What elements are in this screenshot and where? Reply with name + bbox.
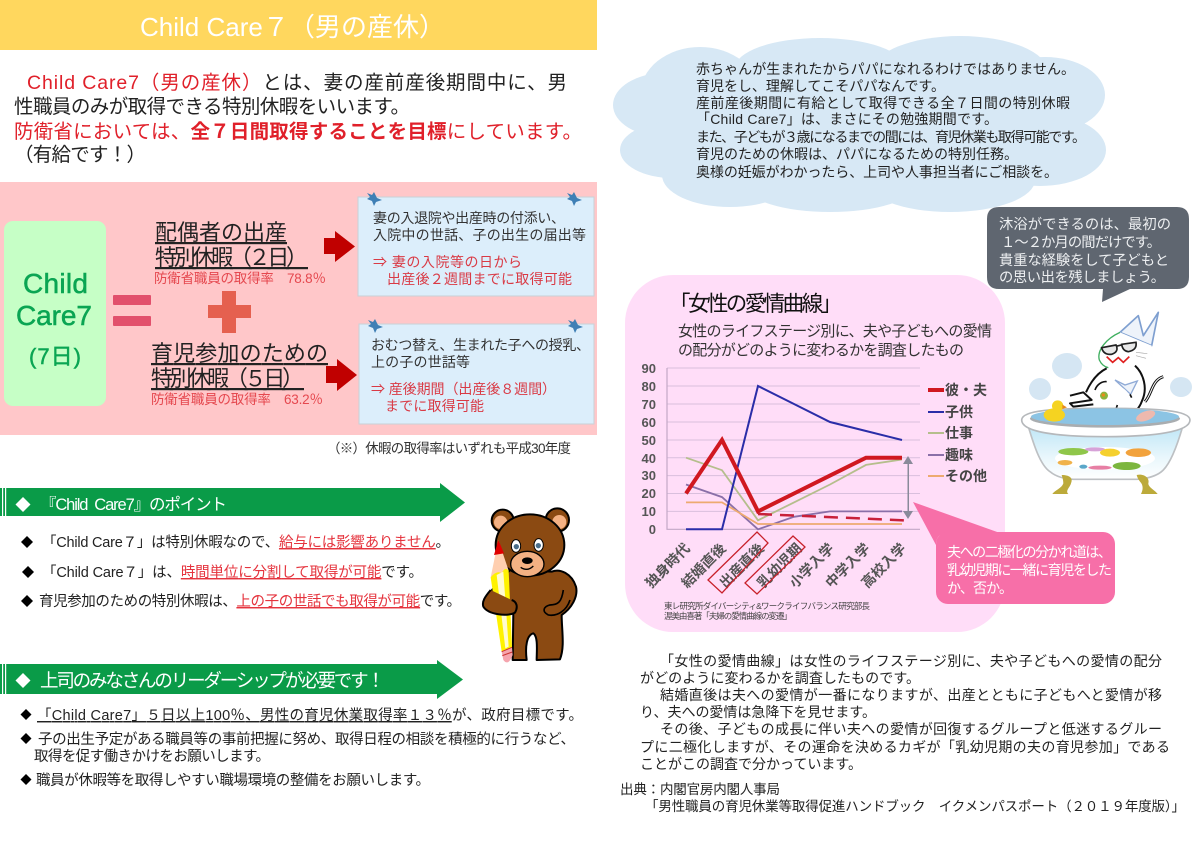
cloud text: [696, 61, 1086, 180]
y axis labels: 20: [642, 486, 656, 501]
illustration: bear with pencil: [483, 508, 576, 662]
x axis labels: 独身時代: [642, 540, 693, 591]
line chart: [642, 361, 987, 594]
heading: childcare participation leave: 防衛省職員の取得率 63.2％: [151, 391, 323, 407]
chart credit: 東レ研究所ダイバーシティ&ワークライフバランス研究部長: [664, 601, 870, 611]
item 2: [20, 730, 575, 765]
green box: Child Care7: Child: [23, 268, 88, 299]
point 3: 育児参加のための特別休暇は、上の子の世話でも取得が可能です。: [39, 593, 461, 610]
green arrow heading: leadership: 上司のみなさんのリーダーシップが必要です！: [40, 670, 385, 691]
note: spouse leave details: 妻の入退院や出産時の付添い、: [373, 210, 565, 226]
legend: 仕事: [945, 425, 973, 441]
heading: spouse childbirth leave: 配偶者の出産: [155, 220, 287, 245]
intro text block: Child Care7（男の産休）とは、妻の産前産後期間中に、男: [27, 72, 567, 94]
note: childcare leave details: 上の子の世話等: [371, 354, 470, 370]
explanatory text block: り、夫への愛情は急降下を見せます。: [640, 704, 876, 720]
y axis labels: [642, 361, 656, 537]
cloud text: 奥様の妊娠がわかったら、上司や人事担当者にご相談を。: [696, 164, 1058, 180]
bathtub: [1022, 400, 1190, 494]
highlight boxes: [708, 532, 805, 594]
source citation: [620, 782, 1185, 814]
green arrow heading: leadership: [0, 660, 463, 699]
dark speech bubble: 貴重な経験をして子どもと: [999, 252, 1169, 269]
series: work: [686, 458, 902, 520]
callout: polarisation: [913, 502, 1115, 604]
chart subtitle: [678, 323, 992, 359]
source citation: 出典：内閣官房内閣人事局: [620, 782, 780, 797]
icon: pin right: [568, 319, 583, 333]
note: childcare leave details: までに取得可能: [385, 398, 484, 414]
series: husband: [686, 440, 902, 511]
item 1: 「Child Care7」５日以上100％、男性の育児休業取得率１３％が、政府目標です。: [37, 707, 583, 724]
chart subtitle: 女性のライフステージ別に、夫や子どもへの愛情: [678, 323, 992, 340]
x axis labels: 小学入学: [786, 540, 837, 591]
note: spouse leave details: [358, 192, 594, 296]
item 2: 子の出生予定がある職員等の事前把握に努め、取得日程の相談を積極的に行うなど、: [38, 730, 575, 748]
series: child: [686, 386, 902, 529]
note: spouse leave details: 入院中の世話、子の出生の届出等: [373, 227, 586, 243]
dark speech bubble: の思い出を残しましょう。: [999, 269, 1165, 286]
heading: childcare participation leave: [151, 341, 328, 407]
arrow: childcare leave: [326, 359, 357, 391]
legend: 趣味: [945, 447, 973, 463]
icon: plus sign: [208, 291, 251, 333]
note: childcare leave details: [359, 319, 594, 424]
source citation: 「男性職員の育児休業等取得促進ハンドブック イクメンパスポート（２０１９年度版）」: [645, 798, 1185, 814]
green arrow heading: points: [0, 483, 465, 522]
title band: [0, 0, 597, 50]
bubbles: [1029, 353, 1192, 400]
cloud text: 「Child Care7」は、まさにその勉強期間です。: [696, 111, 998, 127]
series: other: [686, 502, 902, 524]
x axis labels: 結婚直後: [678, 540, 729, 591]
y axis labels: 80: [642, 379, 656, 394]
icon: pin left: [368, 319, 383, 333]
chart credit: [664, 601, 870, 621]
point 2: 「Child Care７」は、時間単位に分割して取得が可能です。: [42, 564, 423, 581]
heading: spouse childbirth leave: 特別休暇（２日）: [155, 245, 308, 270]
explanatory text block: ことがこの調査で分かっています。: [640, 756, 862, 772]
heading: spouse childbirth leave: [154, 220, 326, 286]
dark speech bubble: 沐浴ができるのは、最初の: [999, 216, 1171, 233]
icon: equals sign: [113, 295, 151, 326]
explanatory text block: [640, 653, 1170, 772]
illustration: cat bathing a kitten: [1022, 312, 1192, 494]
title band: Child Care７（男の産休）: [140, 12, 445, 42]
callout: polarisation: 夫への二極化の分かれ道は、: [947, 544, 1112, 560]
legend: 子供: [945, 404, 973, 420]
cat: [1070, 312, 1163, 413]
cloud text: 育児のための休暇は、パパになるための特別任務。: [696, 146, 1018, 162]
cloud text: 赤ちゃんが生まれたからパパになれるわけではありません。: [696, 61, 1075, 77]
x axis labels: [642, 540, 909, 591]
note: childcare leave details: ⇒ 産後期間（出産後８週間）: [371, 381, 556, 397]
explanatory text block: がどのように変わるかを調査したものです。: [640, 670, 920, 686]
heading: childcare participation leave: 育児参加のための: [151, 341, 328, 366]
intro text block: 性職員のみが取得できる特別休暇をいいます。: [14, 96, 410, 118]
item 3: 職員が休暇等を取得しやすい職場環境の整備をお願いします。: [36, 771, 430, 789]
chart heading: 「女性の愛情曲線」: [669, 292, 842, 316]
heading: childcare participation leave: 特別休暇（５日）: [151, 366, 304, 391]
callout: polarisation: か、否か。: [947, 580, 1013, 596]
point 1: 「Child Care７」は特別休暇なので、給与には影響ありません。: [42, 534, 450, 551]
leadership list: [20, 707, 583, 789]
y axis labels: 90: [642, 361, 656, 376]
intro text block: （有給です！）: [14, 144, 146, 166]
arrow: spouse leave: [324, 231, 355, 262]
cloud text: 産前産後期間に有給として取得できる全７日間の特別休暇: [696, 95, 1070, 111]
panel: child care 7 breakdown: [0, 182, 597, 435]
note: spouse leave details: 出産後２週間までに取得可能: [387, 271, 572, 287]
y axis labels: 30: [642, 468, 656, 483]
dark speech bubble: １～２か月の間だけです。: [1001, 234, 1161, 251]
icon: pin right: [567, 192, 582, 206]
explanatory text block: その後、子どもの成長に伴い夫への愛情が回復するグループと低迷するグルー: [660, 721, 1162, 737]
y axis labels: 0: [649, 522, 656, 537]
green box: Child Care7: [4, 221, 106, 406]
series: husband low group dashed: [758, 514, 908, 520]
green box: Child Care7: (7日): [29, 344, 81, 369]
legend: 彼・夫: [945, 382, 987, 398]
footnote: （※）休暇の取得率はいずれも平成30年度: [327, 440, 571, 456]
y axis labels: 70: [642, 397, 656, 412]
intro text block: [14, 72, 582, 166]
y axis labels: 10: [642, 504, 656, 519]
series: hobby: [686, 484, 902, 529]
heading: spouse childbirth leave: 防衛省職員の取得率 78.8％: [154, 270, 326, 286]
panel: women's affection curve: [625, 275, 1005, 632]
y axis labels: 50: [642, 433, 656, 448]
explanatory text block: 「女性の愛情曲線」は女性のライフステージ別に、夫や子どもへの愛情の配分: [660, 653, 1162, 669]
legend: [928, 382, 987, 484]
cloud text: また、子どもが３歳になるまでの間には、育児休業も取得可能です。: [696, 129, 1086, 145]
explanatory text block: 結婚直後は夫への愛情が一番になりますが、出産とともに子どもへと愛情が移: [660, 687, 1162, 703]
icon: pin left: [367, 192, 382, 206]
green arrow heading: points: 『Child Care7』のポイント: [40, 495, 227, 514]
y axis labels: 60: [642, 415, 656, 430]
note: spouse leave details: ⇒ 妻の入院等の日から: [373, 254, 522, 270]
explanatory text block: プに二極化しますが、その運命を決めるカギが「乳幼児期の夫の育児参加」である: [640, 739, 1170, 755]
y axis labels: 40: [642, 451, 656, 466]
chart credit: 渥美由喜著「夫婦の愛情曲線の変遷」: [664, 611, 792, 621]
range arrow: [903, 456, 913, 519]
x axis labels: 乳幼児期: [754, 540, 805, 591]
x axis labels: 高校入学: [858, 540, 909, 591]
x axis labels: 出産直後: [716, 540, 767, 591]
callout: polarisation: 乳幼児期に一緒に育児をした: [947, 562, 1112, 578]
legend: その他: [945, 468, 987, 484]
intro text block: 防衛省においては、全７日間取得することを目標にしています。: [14, 121, 582, 143]
chart subtitle: の配分がどのように変わるかを調査したもの: [678, 342, 964, 359]
points list: [21, 534, 461, 610]
cloud speech bubble: [613, 36, 1106, 212]
dark speech bubble: [987, 207, 1189, 302]
green box: Child Care7: Care7: [16, 300, 92, 331]
cloud text: 育児をし、理解してこそパパなんです。: [696, 78, 945, 94]
note: childcare leave details: おむつ替え、生まれた子への授乳、: [371, 337, 590, 353]
x axis labels: 中学入学: [822, 540, 873, 591]
item 2: 取得を促す働きかけをお願いします。: [34, 748, 270, 765]
